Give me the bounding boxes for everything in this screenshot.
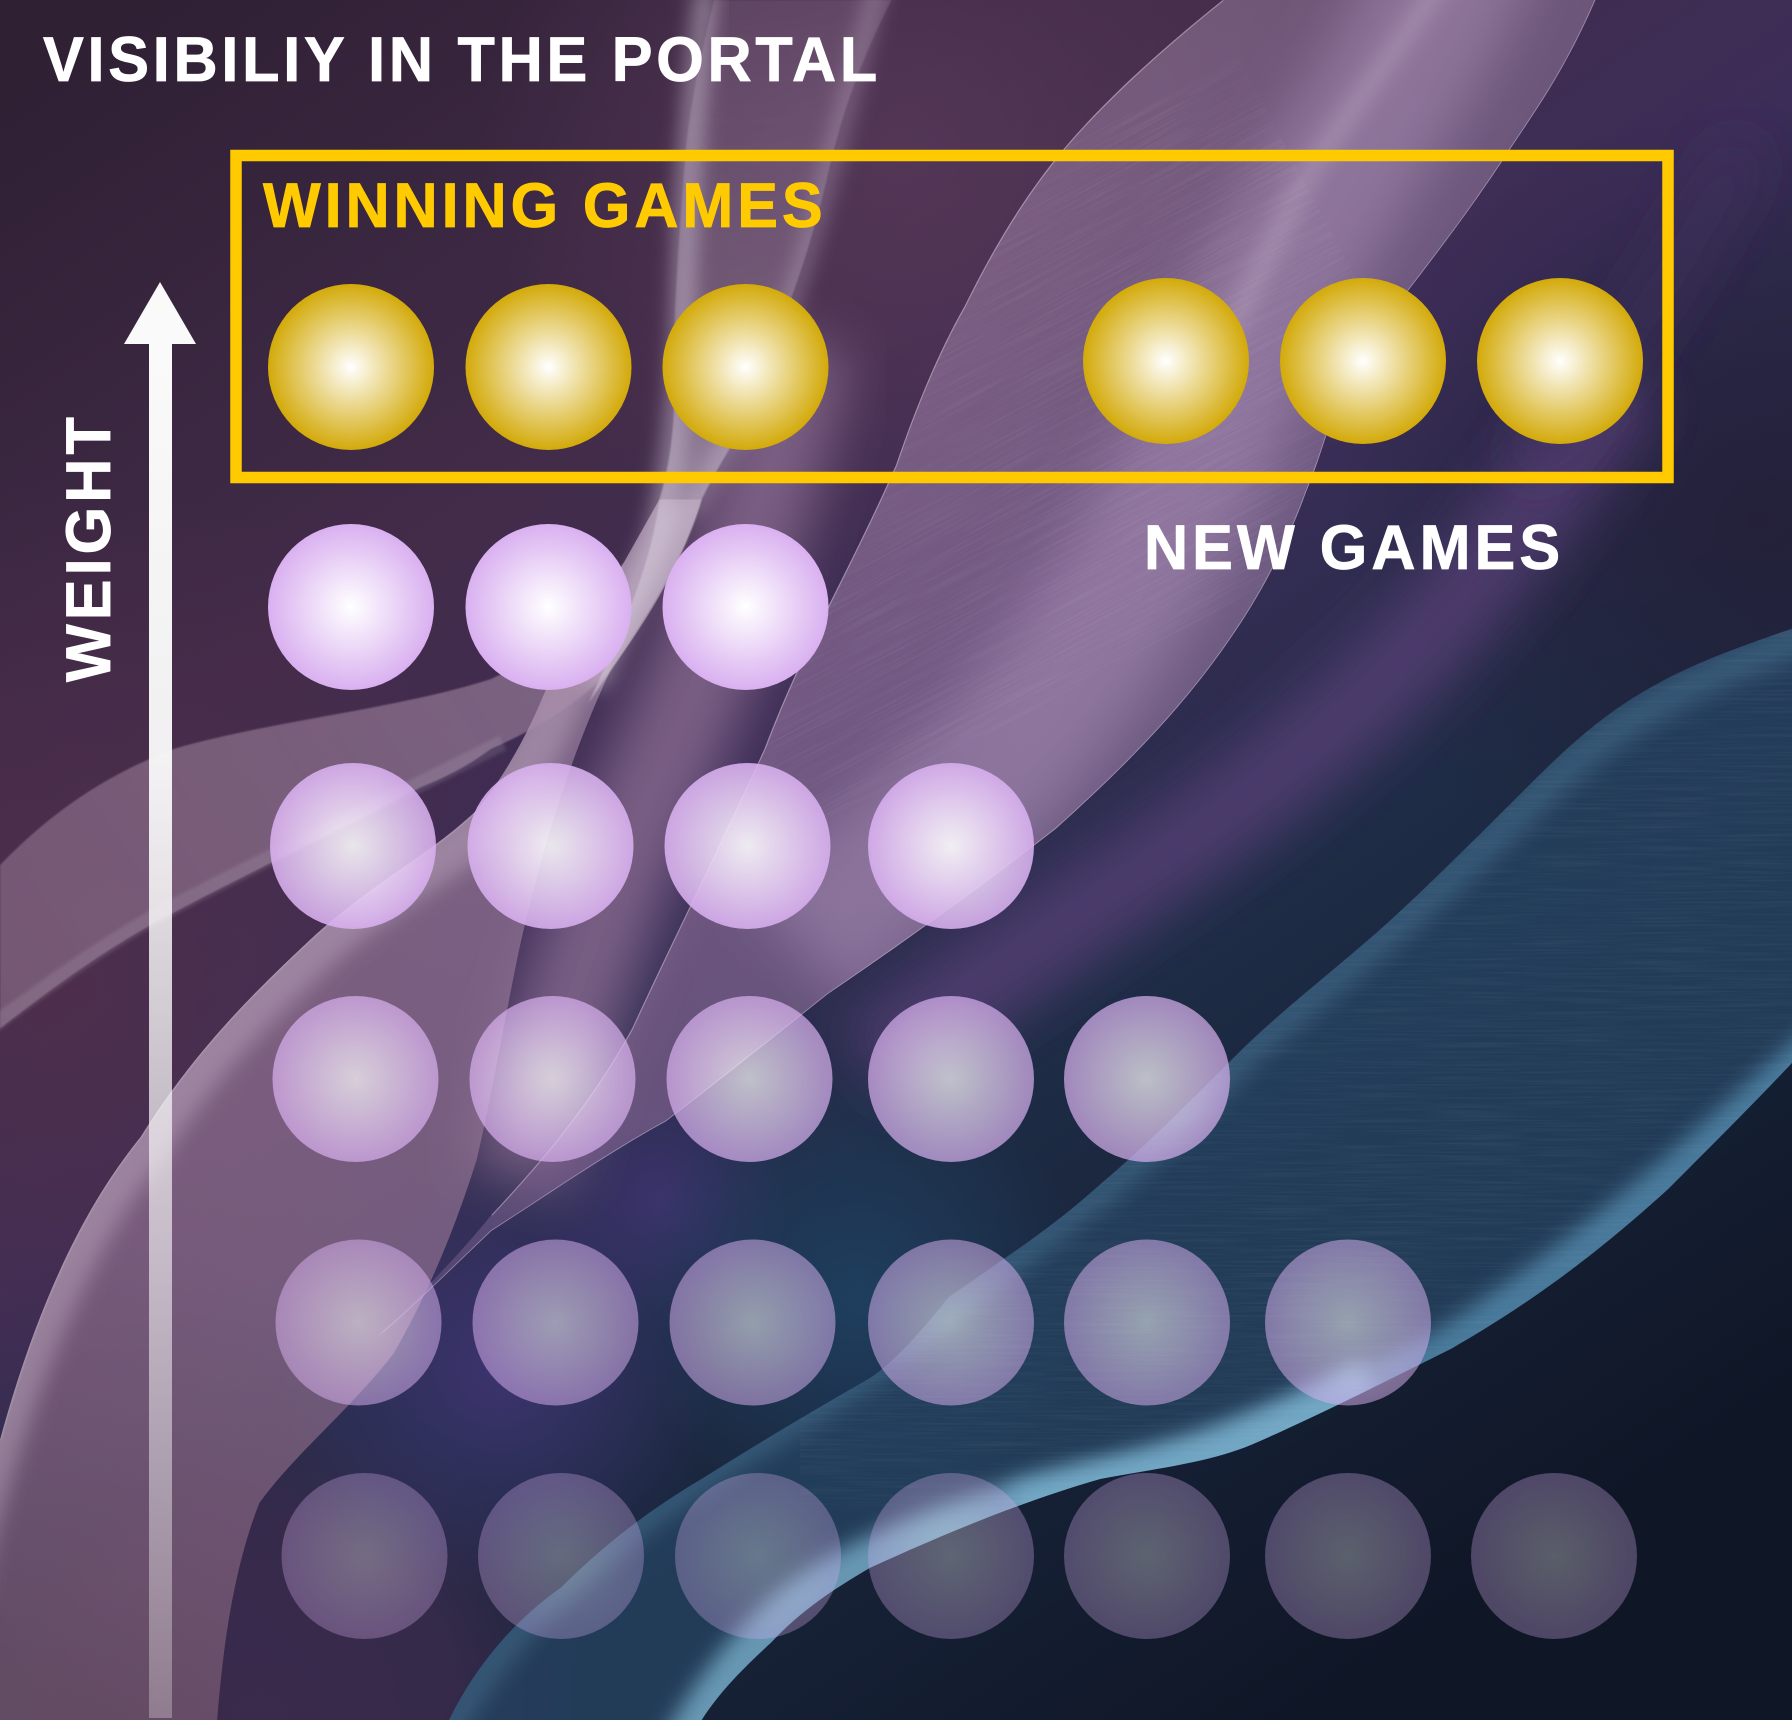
weight axis arrow: [124, 282, 196, 1718]
winning games frame: [236, 156, 1668, 478]
heading: winning games: WINNING GAMES: [263, 171, 823, 241]
circle row 3: [270, 763, 1034, 929]
circle row 4: [272, 996, 1230, 1162]
circle row 2: [268, 524, 828, 690]
circle row 6: [282, 1473, 1637, 1639]
gold circles: winning established games: [268, 284, 828, 450]
circle row 5: [276, 1240, 1431, 1406]
label: new games: NEW GAMES: [1144, 513, 1560, 583]
axis label: weight: WEIGHT: [54, 417, 124, 682]
title: VISIBILIY IN THE PORTAL: [43, 25, 877, 95]
gold circles: winning new games: [1083, 278, 1643, 444]
